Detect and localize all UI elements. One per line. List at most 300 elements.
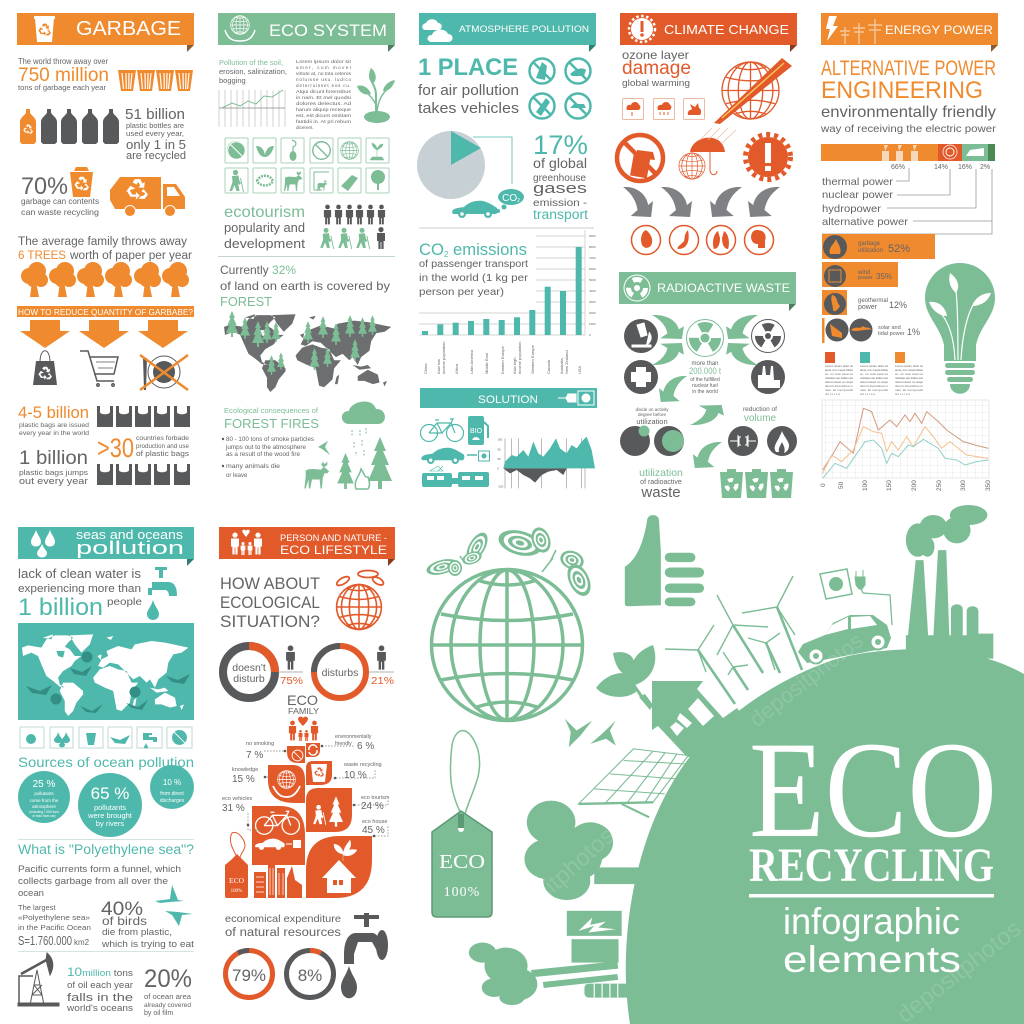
icon: coil — [584, 984, 631, 998]
icon: solar panel — [579, 749, 688, 817]
heading: eco system banner — [218, 13, 395, 52]
text block: lack of clean water: people — [107, 597, 143, 608]
chart: CO2 bar chart: 4000 — [589, 289, 596, 293]
heading: person and nature banner: PERSON AND NATURE - — [280, 533, 387, 543]
panel: radioactive waste — [619, 272, 797, 501]
labels: eco family percentages: eco tourism — [361, 795, 390, 801]
divider: title rule — [749, 894, 994, 898]
subtitle: infographic elements: elements — [783, 939, 961, 980]
text block: 10 million tons: of oil each year — [67, 980, 133, 990]
text block: divide before utilization: utilization — [636, 417, 668, 426]
text block: lorem ipsum: dicerent. — [296, 125, 314, 130]
text block: 20 percent: of ocean area — [144, 994, 191, 1001]
chart: CO2 bar chart: New Zealand — [564, 350, 569, 374]
main globe hill — [626, 649, 1024, 1024]
text block: forest fires: many animals die — [226, 464, 281, 470]
text block: 1 billion bags: 1 billion — [19, 448, 88, 469]
chart: 10 percent circle — [150, 765, 194, 809]
icon: CO2 car — [452, 189, 524, 218]
connector: pie to CO2 — [473, 137, 512, 184]
text block: soil pollution: erosion, salinization, — [219, 67, 287, 76]
text block: 17 percent gases: 17% — [533, 130, 588, 160]
chart: area chart: 0 — [497, 466, 499, 470]
text block: lorem ipsum: virtute at, no tota ceteros — [296, 71, 352, 76]
labels: eco family percentages: eco house — [362, 819, 387, 825]
text block: 1 billion bags — [19, 448, 88, 487]
text block: 20 percent: by oil film — [144, 1010, 173, 1017]
heading: solution banner: SOLUTION — [478, 394, 538, 406]
text block: lorem ipsum: est, est dicunt omittam — [296, 113, 351, 118]
chart: power stack bar: 14% — [934, 164, 948, 171]
chart: energy line chart: 350 — [985, 480, 992, 491]
text block: forest coverage — [220, 263, 390, 309]
chart: alternative energy bars: 52% — [888, 243, 910, 255]
chart: CO2 bar chart: 2000 — [589, 311, 596, 315]
chart: alternative energy bars: power — [858, 275, 873, 281]
text block: small lorem columns: at, no tota ceteros — [895, 372, 924, 376]
icon: bio fuel pump: BIO — [470, 428, 483, 435]
chart: eco family leaf tree: 100% — [231, 889, 242, 894]
icon: globe and umbrella — [679, 128, 736, 179]
text block: small lorem columns: dicunt forensibus in — [895, 384, 923, 388]
icon: down arrows — [20, 320, 188, 348]
chart: energy line chart: 150 — [886, 480, 893, 491]
icon: person with 21 percent: 21% — [371, 676, 394, 687]
text block: forest fires: Ecological consequences of — [224, 408, 318, 415]
subtitle: infographic elements — [783, 901, 961, 980]
text block: small lorem columns: at, no tota ceteros — [825, 372, 854, 376]
text block: small lorem columns: dolores — [825, 392, 840, 396]
text block: forest fires: as a result of the wood fire — [226, 452, 301, 458]
icon: thumbs up — [625, 515, 704, 606]
heading: atmosphere banner: ATMOSPHERE POLLUTION — [459, 24, 589, 34]
icon: four bins — [118, 70, 193, 91]
text block: alternative power: way of receiving the electric power — [820, 124, 997, 135]
icon grid: eco icons — [225, 138, 389, 193]
chart: 25 percent circle: of lead from car) — [32, 814, 56, 818]
chart: energy line chart — [820, 400, 992, 491]
chart: CO2 bar chart: China — [423, 363, 428, 374]
text block: ozone damage — [622, 48, 691, 88]
text block: six trees — [18, 236, 192, 262]
title: eco: ECO — [749, 713, 997, 866]
legend: power types — [822, 168, 992, 234]
panel: climate change — [617, 13, 797, 254]
chart: eco family leaf tree — [225, 717, 372, 898]
text block: forest coverage: Currently 32% — [220, 263, 296, 277]
text block: 70 percent — [21, 173, 99, 217]
text block: lorem ipsum — [296, 59, 352, 130]
icon: bags row two — [97, 464, 190, 485]
heading: sources of ocean pollution: Sources of ocean pollution — [18, 754, 194, 770]
chart: 10 percent circle: from direct — [160, 791, 184, 797]
text block: 10 million tons: world's oceans — [66, 1003, 134, 1013]
panel: energy power — [820, 13, 998, 491]
icon: small birds — [565, 719, 616, 747]
chart: CO2 bar chart: Africa — [454, 363, 459, 374]
icon: electric car — [798, 615, 891, 664]
chart: alternative energy bars: utilization — [858, 248, 883, 254]
chart: 25 percent circle: 25 % — [33, 779, 56, 790]
text block: divide before utilization: divide on activity — [635, 407, 669, 412]
icon: bottles — [20, 109, 119, 144]
icon: centre radiation — [686, 320, 724, 356]
text block: utilization waste: of radioactive — [640, 479, 682, 486]
chart: CO2 bar chart: Latin America — [469, 349, 474, 374]
text block: divide before utilization: degree before — [638, 412, 667, 417]
chart: doesn't disturb donut — [223, 646, 275, 698]
heading: climate banner — [620, 13, 797, 52]
text block: 4-5 billion — [18, 403, 89, 437]
icon: factory — [906, 550, 993, 659]
text block: 51 billion bottles — [125, 106, 186, 162]
icon: sun warning — [746, 134, 790, 180]
icon: round tree — [524, 801, 641, 900]
text block: 200000 tons: of the fulfilled — [690, 377, 720, 383]
icon: person with 21 percent — [369, 645, 394, 687]
text block: 20 percent — [144, 965, 192, 1017]
text block: ecotourism — [224, 204, 306, 251]
icon: garbage truck — [110, 177, 185, 216]
icon: oil pump — [18, 953, 59, 1006]
text block: 1 billion bags: plastic bags jumps — [19, 468, 88, 477]
text block: small lorem columns: at, no tota ceteros — [860, 372, 888, 376]
text block: polyethylene sea: The largest — [18, 903, 56, 912]
heading: seas banner: pollution — [76, 538, 184, 558]
chart: alternative energy bars: 1% — [907, 327, 920, 337]
chart: energy line chart: 50 — [838, 481, 845, 489]
text block: 200000 tons: more than — [691, 361, 719, 367]
heading: radioactive banner: RADIOACTIVE WASTE — [657, 281, 790, 295]
labels: eco family percentages: environmentally — [335, 734, 372, 740]
icon: lower chimneys and smoke — [469, 943, 618, 1005]
heading: energy banner: ENERGY POWER — [885, 23, 993, 37]
text block: polyethylene sea: What is "Polyethylene sea"? — [18, 842, 194, 857]
heading: climate banner: CLIMATE CHANGE — [664, 22, 789, 37]
chart: 65 percent circle: were brought — [87, 811, 133, 820]
text block: alternative power — [820, 57, 997, 135]
icon: person with 75 percent: 75% — [280, 676, 303, 687]
icon: hikers row — [320, 227, 385, 249]
chart: CO2 bar chart: Eastern Europe — [500, 345, 505, 374]
map: world forests — [224, 311, 391, 392]
chart: alternative energy bars: wind — [857, 270, 870, 276]
icon: red globe with butterflies — [335, 570, 385, 629]
text block: divide before utilization — [635, 407, 669, 426]
text block: forest fires: or leave — [226, 473, 248, 479]
text block: ozone damage: ozone layer — [622, 48, 689, 62]
text block: 1 place: 1 PLACE — [418, 54, 518, 81]
text block: lorem ipsum: deterruisset eos cu. — [296, 83, 351, 88]
chart: alternative energy bars: 12% — [889, 300, 907, 310]
chart: power stack bar: 16% — [958, 164, 972, 171]
text block: how about: SITUATION? — [220, 613, 320, 631]
labels: eco family percentages: eco vehicles — [222, 796, 253, 802]
text block: 51 billion bottles: 51 billion — [125, 106, 185, 123]
panel: eco recycling cover — [425, 505, 1024, 1024]
chart: energy line chart: 250 — [936, 480, 943, 491]
text block: more than 30 countries: countries forbade — [136, 435, 189, 442]
chart: CO2 bar chart: Middle East — [484, 352, 489, 374]
icon: prohibition signs — [530, 58, 590, 118]
panel: garbage — [17, 13, 194, 487]
text block: polyethylene sea: S=1.760.000 — [18, 933, 72, 948]
watermarks: depositphotos — [745, 628, 868, 732]
text block: lack of clean water — [18, 566, 143, 621]
chart: alternative energy bars: solar and — [878, 325, 901, 331]
text block: small lorem columns: Lorem ipsum dolor sit — [860, 364, 888, 368]
labels: eco family percentages — [222, 734, 390, 837]
chart: 25 percent circle: atmosphere — [32, 804, 56, 809]
text block: small lorem columns: dolores — [860, 392, 876, 396]
text block: forest fires: FOREST FIRES — [224, 416, 319, 431]
text block: 20 percent: 20% — [144, 965, 192, 993]
text block: utilization waste: waste — [640, 484, 681, 501]
text block: 1 billion bags: out every year — [19, 476, 88, 487]
icon grid: water icons — [20, 727, 192, 748]
panel: eco lifestyle — [219, 527, 395, 998]
text block: 4-5 billion: every year in the world — [19, 430, 89, 437]
icon: weather boxes — [622, 98, 704, 120]
icon: factory smoke — [906, 505, 987, 557]
heading: eco family: ECO — [287, 692, 318, 708]
text block: alternative power: environmentally friendly — [821, 104, 996, 121]
chart: 10 percent circle: discharges — [160, 798, 185, 804]
heading: garbage banner: GARBAGE — [76, 18, 181, 40]
icon: socket and plug — [820, 569, 892, 625]
icon: crossed plate — [140, 355, 188, 390]
text block: CO2 emissions — [419, 240, 529, 298]
text block: small lorem columns: nam. Et mel quodsi — [860, 388, 888, 392]
text block: 4-5 billion: 4-5 billion — [18, 403, 89, 422]
text block: 750 million tons: tons of garbage each year — [18, 83, 106, 92]
text block: 10 million tons — [66, 965, 134, 1013]
icon: eco 100 percent tag: 100% — [444, 885, 480, 900]
text block: small lorem columns: noluisse usu ludico eos — [860, 376, 888, 380]
labels: eco family percentages: 45 % — [362, 825, 385, 836]
chart: 25 percent circle: come from the — [30, 798, 59, 803]
icon: organ circles — [632, 226, 774, 254]
text block: 40 percent birds: die from plastic, — [102, 927, 172, 938]
text block: polyethylene sea — [18, 842, 194, 948]
text block: CO2 emissions: person per year) — [419, 287, 504, 298]
text block: lorem ipsum: in nam. Et mel quodsi — [296, 95, 351, 100]
icon: leaves — [596, 645, 655, 697]
chart: alternative energy bars: tidal power — [878, 331, 905, 337]
icon: tram — [422, 466, 489, 487]
text block: how about — [220, 575, 320, 631]
text block: forest fires — [222, 408, 319, 479]
text block: ozone damage: damage — [622, 58, 691, 79]
heading: seas banner: seas and oceans — [76, 527, 184, 542]
text block: forest coverage: of land on earth is covered by — [220, 279, 390, 293]
text block: reduction of volume: reduction of — [743, 406, 777, 413]
chart: CO2 bar chart — [419, 230, 596, 374]
chart: 25 percent circle — [18, 771, 70, 823]
text block: forest fires: jumps out to the atmosphere — [225, 445, 307, 451]
chart: CO2 bar chart: Canada — [546, 359, 551, 374]
labels: eco family percentages: friendly — [335, 741, 352, 747]
text block: soil pollution: Pollution of the soil, — [219, 58, 283, 67]
text block: 40 percent birds: which is trying to eat — [101, 939, 194, 950]
text block: 750 million tons: The world throw away over — [18, 57, 108, 66]
text block: small lorem columns: dolores — [895, 392, 910, 396]
chart: area chart: 50 — [497, 448, 501, 452]
icon: compress and fire — [728, 426, 797, 456]
text block: 10 million tons: falls in the — [67, 992, 133, 1004]
text block: CO2 emissions: in the world (1 kg per — [419, 273, 529, 284]
text block: 1 place: takes vehicles — [418, 100, 519, 117]
labels: eco family percentages: 7 % — [246, 750, 263, 761]
legend: power types: thermal power — [822, 176, 894, 188]
chart: CO2 bar chart: Asia high — [512, 358, 517, 374]
legend: power types: hydropower — [822, 203, 882, 215]
text block: 200000 tons: in the world — [692, 389, 718, 395]
icon: decay circles — [620, 426, 684, 456]
text block: six trees: worth of paper per year — [69, 250, 192, 262]
text block: lorem ipsum: fastidii in. At pri rebum — [296, 119, 351, 124]
text block: 1 place — [418, 54, 519, 117]
heading: person and nature banner: ECO LIFESTYLE — [280, 543, 387, 557]
chart: CO2 bar chart: 7000 — [589, 256, 596, 260]
text block: small lorem columns: nam. Et mel quodsi — [895, 388, 923, 392]
text block: utilization waste — [639, 467, 683, 501]
text block: CO2 emissions: emissions — [448, 240, 527, 259]
chart: 25 percent circle: (including 7.000 tons — [29, 810, 59, 814]
text block: 17 percent gases: gases — [533, 180, 587, 197]
text block: reduction of volume — [743, 406, 777, 424]
text block: 51 billion bottles: only 1 in 5 — [126, 137, 186, 152]
icon: bicycle — [420, 419, 464, 442]
icon: power station — [567, 911, 622, 963]
text block: small lorem columns: amet, cum movet virtute — [860, 368, 888, 372]
chart: alternative energy bars: garbage — [858, 241, 881, 247]
chart: CO2 bar chart: income population — [441, 342, 446, 374]
text block: lorem ipsum: noluisse usu. ludico — [296, 77, 351, 82]
text block: 70 percent: garbage can contents — [21, 197, 99, 206]
chart: energy line chart: 200 — [911, 480, 918, 491]
text block: 17 percent gases: greenhouse — [533, 173, 586, 184]
labels: eco family percentages: knowledge — [232, 767, 258, 773]
heading: garbage banner — [17, 13, 194, 52]
chart: area chart: -100 — [497, 484, 504, 488]
icon: radiation outline — [752, 320, 784, 352]
chart: 65 percent circle — [78, 773, 142, 837]
text block: 200000 tons: 200.000 t — [689, 366, 721, 376]
text block: small lorem columns: nam. Et mel quodsi — [825, 388, 853, 392]
text block: soil pollution: bogging — [219, 76, 246, 85]
icon: recycling can — [70, 167, 93, 197]
text block: 750 million tons — [18, 57, 109, 92]
icon: eco 100 percent tag: ECO — [439, 851, 485, 873]
labels: eco family percentages: 24 % — [361, 801, 384, 812]
text block: polyethylene sea: Pacific currents form a funnel, which — [18, 864, 181, 875]
legend: power types: alternative power — [822, 216, 909, 228]
chart: CO2 bar chart: USA — [577, 365, 582, 374]
text block: soil pollution — [219, 58, 287, 85]
text block: CO2 emissions: 2 — [444, 250, 449, 259]
text block: 17 percent gases: emission - — [533, 197, 588, 209]
labels: eco family percentages: 6 % — [357, 741, 374, 752]
chart: pie 17 percent — [417, 131, 485, 199]
chart: CO2 bar chart: 1000 — [589, 322, 596, 326]
chart: 8 percent donut: 8% — [298, 966, 322, 985]
text block: how about: HOW ABOUT — [220, 575, 320, 593]
chart: power stack bar: 2% — [980, 164, 990, 171]
text block: more than 30 countries — [97, 433, 189, 463]
chart: 65 percent circle: 65 % — [91, 784, 129, 803]
chart: CO2 bar chart: 6000 — [589, 267, 596, 271]
text block: small lorem columns: deterruisset cu atqui — [860, 380, 888, 384]
text block: ecotourism: ecotourism — [224, 204, 305, 221]
panel: eco system — [218, 13, 395, 489]
text block: 40 percent birds — [101, 899, 194, 950]
icon: CO2 car: 2 — [517, 198, 520, 204]
text block: 4-5 billion: plastic bags are issued — [19, 422, 89, 429]
text block: lorem ipsum: amet, cum movet — [296, 65, 352, 70]
chart: 10 percent circle: 10 % — [163, 778, 181, 787]
heading: eco family — [287, 692, 320, 716]
chart: eco family leaf tree: ECO — [229, 876, 245, 885]
chart: 8 percent donut — [286, 950, 334, 998]
text block: polyethylene sea: in the Pacific Ocean — [18, 923, 91, 932]
chart: 65 percent circle: by rivers — [96, 819, 124, 828]
text block: 51 billion bottles: are recycled — [126, 150, 186, 162]
text block: six trees: 6 TREES — [18, 250, 66, 262]
heading: how to reduce: HOW TO REDUCE QUANTITY OF GARBABE? — [18, 307, 193, 317]
chart: CO2 bar chart: Asia low — [436, 359, 441, 374]
text block: more than 30 countries: >30 — [97, 433, 134, 463]
chart: disturbs donut — [314, 646, 366, 698]
watermarks: depositphotos — [491, 822, 620, 942]
labels: eco family percentages: waste recycling — [343, 762, 382, 768]
heading: eco family: FAMILY — [288, 707, 320, 716]
text block: 40 percent birds: 40% — [101, 899, 143, 920]
text block: polyethylene sea: «Polyethylene sea» — [18, 913, 90, 922]
icon: butterfly left — [425, 529, 492, 578]
text block: more than 30 countries: of plastic bags — [136, 449, 189, 458]
icon: power plant — [751, 360, 785, 394]
chart: alternative energy bars: power — [858, 304, 878, 311]
chart: CO2 bar chart: 3000 — [589, 300, 596, 304]
text block: ecotourism: popularity and — [224, 221, 305, 235]
text block: 200000 tons — [689, 361, 721, 395]
icon: CO2 car: CO — [502, 193, 517, 204]
text block: lack of clean water: lack of clean water is — [18, 566, 142, 581]
labels: eco family percentages: 10 % — [344, 770, 367, 781]
icon: recycle bag — [33, 351, 57, 385]
text block: economical expenditure — [225, 913, 341, 939]
icon: wind turbines — [665, 576, 802, 704]
labels: eco family percentages: no smoking — [246, 741, 274, 747]
subtitle: infographic elements: infographic — [783, 901, 960, 942]
text block: CO2 emissions: CO — [419, 240, 444, 259]
text block: small lorem columns: dicunt forensibus in — [860, 384, 888, 388]
text block: 40 percent birds: of birds — [102, 914, 147, 928]
icon: radioactive bins — [720, 469, 793, 498]
text block: 70 percent: 70% — [21, 173, 68, 200]
text block: CO2 emissions: of passenger transport — [419, 259, 528, 270]
icon: eco 100 percent tag — [432, 731, 492, 917]
chart: alternative energy bars: geothermal — [858, 298, 888, 304]
labels: eco family percentages: 15 % — [232, 774, 255, 785]
text block: lorem ipsum: harum aliquip recteque — [296, 107, 352, 112]
chart: area chart: 100 — [497, 438, 503, 442]
icon: green arrows — [652, 315, 758, 468]
text block: 1 place: for air pollution — [418, 82, 519, 99]
heading: seas banner — [18, 527, 194, 566]
icon: rain cloud and fire trees — [304, 401, 392, 489]
